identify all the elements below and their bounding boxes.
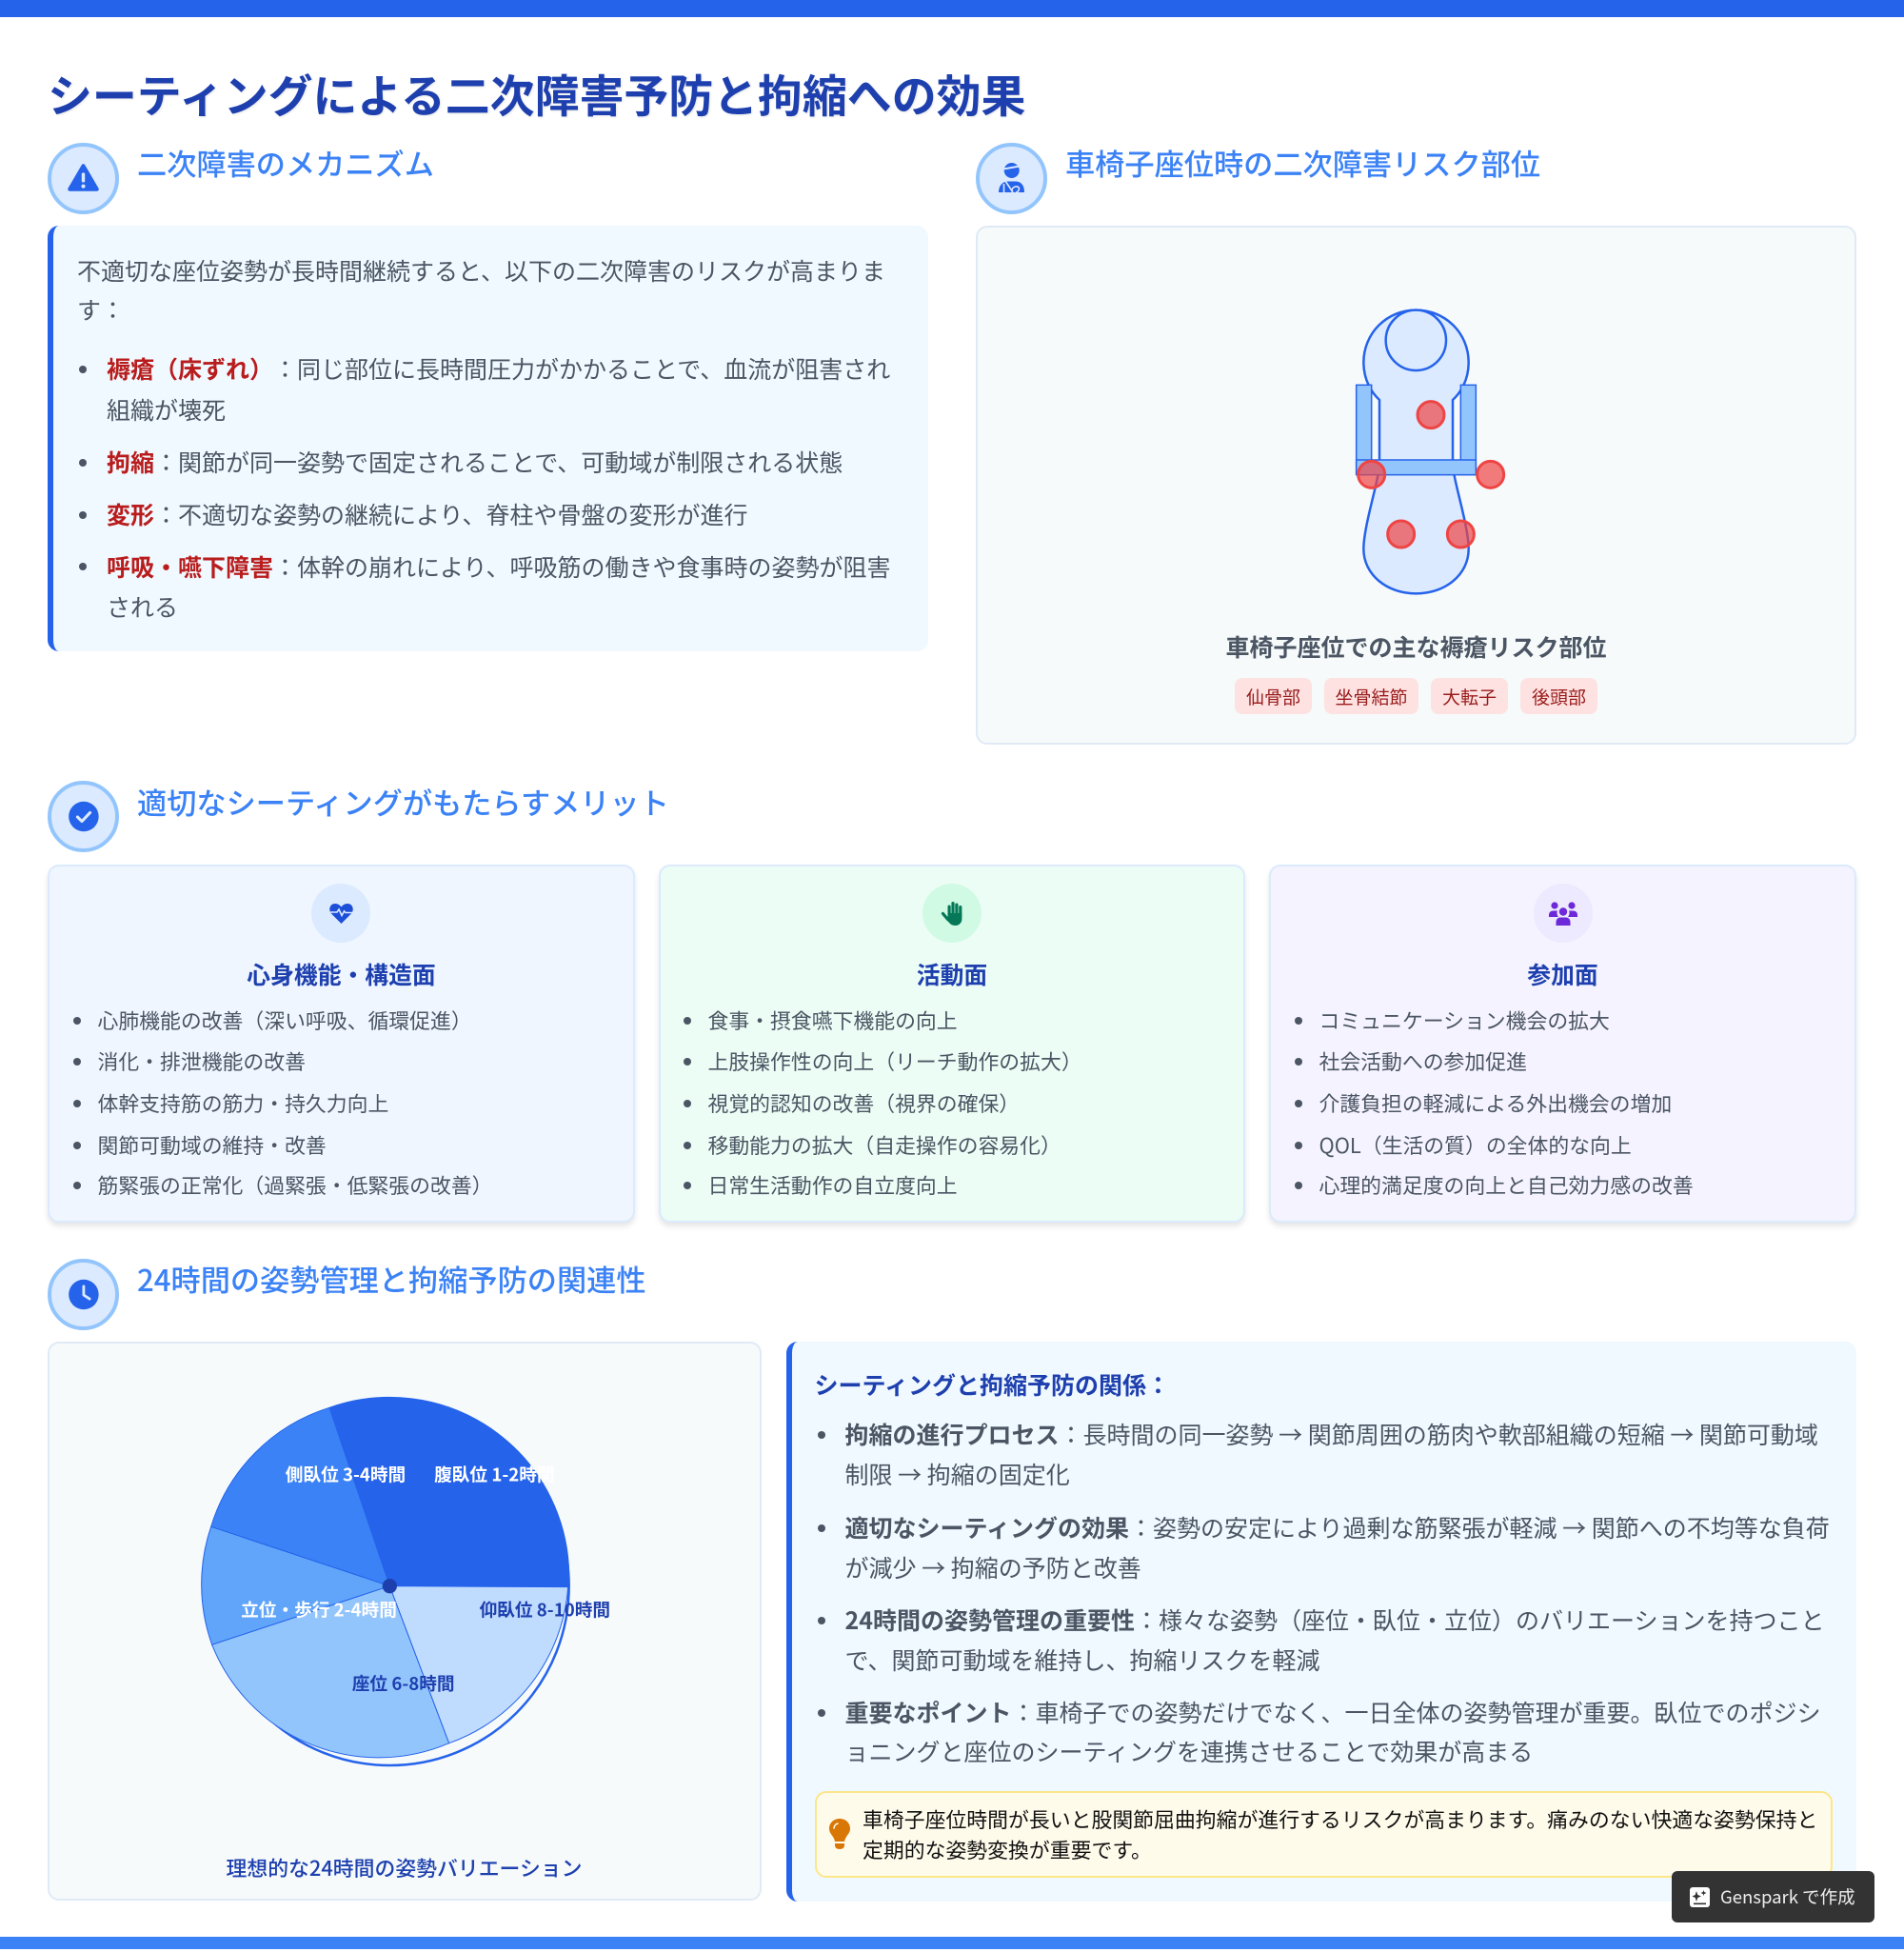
tag: sacrum: [1235, 678, 1312, 714]
card: body functions: [47, 865, 636, 1227]
card heading: 参加面: [1527, 957, 1598, 991]
tip text: [863, 1803, 1817, 1864]
item: key point: 重要なポイント：車椅子での姿勢だけでなく、一日全体の姿勢管理が重要。臥位でのポジシ: [845, 1695, 1821, 1729]
tag: occiput: 後頭部: [1532, 684, 1586, 709]
section icon: check: [48, 781, 119, 852]
section icon: injured user: [976, 143, 1047, 214]
item: 24 hour management: で、関節可動域を維持し、拘縮リスクを軽減: [845, 1643, 1320, 1677]
badge text: Genspark で作成: [1720, 1884, 1855, 1909]
tip text: 定期的な姿勢変換が重要です。: [863, 1835, 1152, 1864]
diagram caption: 車椅子座位での主な褥瘡リスク部位: [1225, 629, 1607, 664]
item: pressure sore: 褥瘡（床ずれ）：同じ部位に長時間圧力がかかることで、血流が阻害され: [107, 351, 890, 386]
tag: ischial tuberosity: 坐骨結節: [1335, 684, 1407, 709]
intro text: [77, 253, 885, 327]
panel: mechanism: [48, 226, 928, 651]
callout: tip: [815, 1791, 1832, 1878]
tag: ischial tuberosity: [1324, 678, 1418, 714]
item list: 社会活動への参加促進: [1319, 1046, 1527, 1076]
badge: Genspark: [1672, 1871, 1874, 1922]
bottom bar: [0, 1937, 1904, 1949]
panel: pie chart: [48, 1342, 762, 1901]
item list: 体幹支持筋の筋力・持久力向上: [97, 1088, 388, 1118]
item list: 移動能力の拡大（自走操作の容易化）: [708, 1130, 1061, 1160]
item list: 関節可動域の維持・改善: [97, 1130, 327, 1160]
icon: hand: [922, 884, 982, 943]
pie chart: posture variation: 側臥位 3-4時間: [286, 1462, 406, 1487]
tag: sacrum: 仙骨部: [1246, 684, 1300, 709]
item list: 食事・摂食嚥下機能の向上: [708, 1006, 958, 1035]
item: seating effect: 適切なシーティングの効果：姿勢の安定により過剰な筋緊張が軽減 → 関節への不均等な負荷: [845, 1510, 1830, 1544]
item: respiration: 呼吸・嚥下障害：体幹の崩れにより、呼吸筋の働きや食事時の姿勢が阻害: [107, 549, 891, 584]
item: seating effect: [845, 1508, 1830, 1588]
item: contracture: 拘縮：関節が同一姿勢で固定されることで、可動域が制限される状態: [107, 445, 843, 479]
item: key point: ョニングと座位のシーティングを連携させることで効果が高まる: [845, 1734, 1533, 1768]
intro text: 不適切な座位姿勢が長時間継続すると、以下の二次障害のリスクが高まりま: [77, 253, 885, 288]
top bar: [0, 0, 1904, 17]
pie chart: posture variation: 仰臥位 8-10時間: [480, 1596, 610, 1622]
item: contracture process: 拘縮の進行プロセス：長時間の同一姿勢 → 関節周囲の筋肉や軟部組織の短縮 → 関節可動域: [845, 1417, 1818, 1451]
tip text: 車椅子座位時間が長いと股関節屈曲拘縮が進行するリスクが高まります。痛みのない快適な姿勢保持と: [863, 1803, 1817, 1834]
heading: benefits: 適切なシーティングがもたらすメリット: [137, 780, 669, 823]
item list: 心肺機能の改善（深い呼吸、循環促進）: [97, 1006, 472, 1035]
pie chart: posture variation: [201, 1396, 610, 1767]
card heading: 活動面: [917, 957, 987, 991]
item list: 消化・排泄機能の改善: [97, 1046, 306, 1076]
item list: コミュニケーション機会の拡大: [1319, 1006, 1610, 1035]
item: key point: [845, 1693, 1821, 1772]
card heading: 心身機能・構造面: [247, 957, 436, 991]
item list: 筋緊張の正常化（過緊張・低緊張の改善）: [97, 1170, 493, 1200]
panel heading: シーティングと拘縮予防の関係：: [815, 1367, 1170, 1402]
section icon: clock: [48, 1259, 119, 1330]
icon: lightbulb: [829, 1819, 850, 1849]
pie chart: posture variation: 腹臥位 1-2時間: [434, 1462, 555, 1487]
item list: QOL（生活の質）の全体的な向上: [1319, 1130, 1632, 1160]
item: deformity: 変形：不適切な姿勢の継続により、脊柱や骨盤の変形が進行: [107, 497, 748, 531]
item: seating effect: が減少 → 拘縮の予防と改善: [845, 1550, 1141, 1584]
icon: badge mark: [1690, 1887, 1710, 1907]
heading: mechanism: 二次障害のメカニズム: [137, 141, 434, 184]
item: pressure sore: 組織が壊死: [107, 392, 226, 427]
tag: occiput: [1520, 678, 1597, 714]
tag: greater trochanter: 大転子: [1442, 684, 1497, 709]
diagram: seated body with risk points: [1356, 309, 1506, 595]
icon: users: [1534, 884, 1593, 943]
item list: [73, 1006, 493, 1200]
pie caption: 理想的な24時間の姿勢バリエーション: [227, 1853, 582, 1882]
item list: 介護負担の軽減による外出機会の増加: [1319, 1088, 1672, 1118]
item: 24 hour management: [845, 1601, 1825, 1680]
item list: [1295, 1006, 1694, 1200]
item: respiration: [107, 547, 891, 627]
card: activity: [658, 865, 1246, 1227]
section icon: warning: [48, 143, 119, 214]
heading: risk sites: 車椅子座位時の二次障害リスク部位: [1065, 141, 1540, 184]
item list: 日常生活動作の自立度向上: [708, 1170, 958, 1200]
pie chart: posture variation: 座位 6-8時間: [352, 1670, 455, 1696]
tag: greater trochanter: [1431, 678, 1508, 714]
item: contracture process: [845, 1415, 1818, 1495]
panel: risk sites: [976, 226, 1856, 745]
pie chart: posture variation: 立位・歩行 2-4時間: [241, 1596, 397, 1622]
item list: 心理的満足度の向上と自己効力感の改善: [1319, 1170, 1694, 1200]
card: participation: [1268, 865, 1857, 1227]
item: pressure sore: [107, 349, 890, 430]
icon: heart pulse: [311, 884, 370, 943]
title: シーティングによる二次障害予防と拘縮への効果: [48, 61, 1025, 126]
panel: seating and contracture: [786, 1342, 1856, 1902]
item list: 視覚的認知の改善（視界の確保）: [708, 1088, 1020, 1118]
item: 24 hour management: 24時間の姿勢管理の重要性：様々な姿勢（座位・臥位・立位）のバリエーションを持つこと: [845, 1603, 1825, 1637]
item list: [684, 1006, 1082, 1200]
intro text: す：: [77, 292, 125, 327]
item: respiration: される: [107, 589, 178, 624]
item: contracture process: 制限 → 拘縮の固定化: [845, 1457, 1070, 1491]
heading: 24 hour posture: 24時間の姿勢管理と拘縮予防の関連性: [137, 1257, 646, 1300]
item list: 上肢操作性の向上（リーチ動作の拡大）: [708, 1046, 1082, 1076]
